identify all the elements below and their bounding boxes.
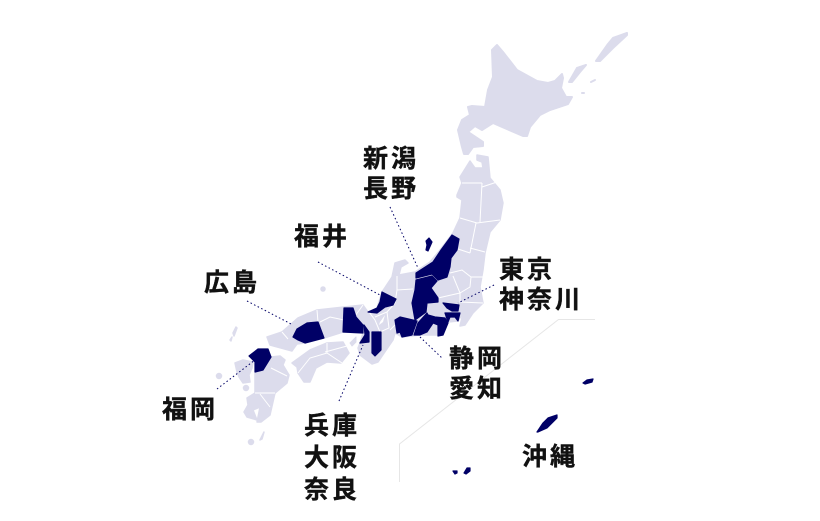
honshu — [267, 155, 503, 364]
label: okinawa: 沖縄 — [522, 443, 578, 471]
label: shizuoka aichi: 静岡 — [449, 345, 505, 373]
label: hyogo osaka nara: 兵庫 — [304, 412, 360, 440]
awaji island — [350, 337, 356, 346]
kyushu and islands — [216, 287, 325, 444]
tokyo — [443, 303, 459, 311]
label: fukui: 福井 — [294, 223, 350, 251]
sado — [426, 238, 432, 251]
okinawa inset frame — [400, 320, 595, 482]
hokkaido — [458, 33, 627, 154]
label: fukuoka: 福岡 — [162, 396, 218, 424]
osaka — [360, 325, 369, 343]
label: shizuoka aichi — [449, 345, 505, 403]
lake biwa — [379, 315, 385, 325]
label: hiroshima: 広島 — [204, 269, 260, 297]
shikoku — [292, 342, 349, 382]
label: tokyo kanagawa — [499, 256, 583, 314]
hiroshima — [293, 322, 324, 343]
okinawa islands — [453, 379, 593, 474]
fukui — [368, 292, 396, 313]
fukuoka — [249, 349, 271, 372]
leader lines — [217, 207, 494, 401]
label: shizuoka aichi: 愛知 — [449, 375, 505, 403]
label: tokyo kanagawa: 東京 — [499, 256, 555, 284]
niigata — [416, 235, 459, 280]
highlighted prefectures — [249, 235, 593, 474]
shizuoka — [414, 313, 448, 336]
label: hyogo osaka nara: 大阪 — [304, 444, 360, 472]
nagano — [412, 276, 438, 320]
label: tokyo kanagawa: 神奈川 — [499, 286, 583, 314]
nara — [372, 332, 381, 356]
kanagawa — [445, 313, 460, 322]
aichi — [395, 317, 417, 337]
label: niigata nagano — [363, 145, 419, 203]
prefecture borders — [255, 182, 500, 407]
hyogo — [343, 308, 363, 333]
label: niigata nagano: 新潟 — [363, 145, 419, 173]
label: hyogo osaka nara: 奈良 — [304, 476, 360, 504]
label: hyogo osaka nara — [304, 412, 360, 504]
label: niigata nagano: 長野 — [363, 175, 419, 203]
